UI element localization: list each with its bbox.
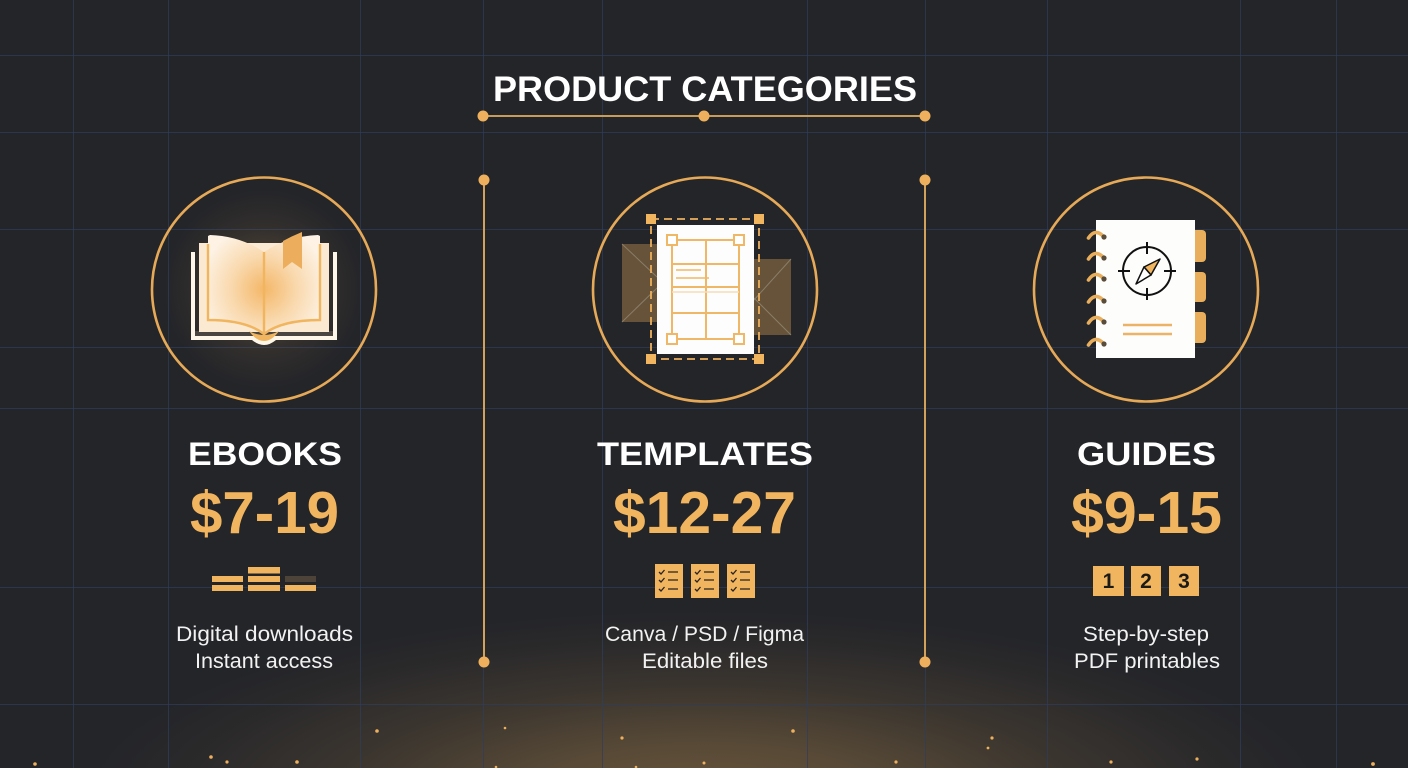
right divider: [920, 174, 930, 668]
text: templates description: Editable files: [642, 650, 768, 673]
heading: ebooks: EBOOKS: [188, 436, 342, 472]
text: templates description: Canva / PSD / Figma: [605, 623, 804, 646]
icon: stacked bars: [212, 567, 316, 591]
text: guides description: [1074, 623, 1220, 673]
heading: templates: TEMPLATES: [597, 436, 813, 472]
icon: numbered steps: 3: [1178, 570, 1190, 593]
icon: numbered steps: 2: [1140, 570, 1152, 593]
icon: checklists: [655, 564, 755, 598]
price: templates: $12-27: [613, 480, 796, 546]
icon: open book: [152, 178, 376, 402]
title bracket: [478, 110, 930, 122]
icon: spiral notebook with compass: [1034, 178, 1258, 402]
particles: [33, 727, 1375, 768]
panel: guides: [1034, 178, 1258, 673]
text: ebooks description: [176, 623, 353, 673]
text: templates description: [605, 623, 804, 673]
title: PRODUCT CATEGORIES: [493, 70, 917, 109]
icon: numbered steps: 1: [1103, 570, 1115, 593]
left divider: [478, 174, 490, 668]
text: guides description: Step-by-step: [1083, 623, 1209, 646]
price: guides: $9-15: [1071, 480, 1222, 546]
heading: guides: GUIDES: [1077, 436, 1216, 472]
panel: templates: [593, 178, 817, 673]
price: ebooks: $7-19: [190, 480, 339, 546]
text: ebooks description: Digital downloads: [176, 623, 353, 646]
icon: numbered steps: [1093, 566, 1199, 596]
icon: template document: [593, 178, 817, 402]
text: ebooks description: Instant access: [195, 650, 333, 673]
panel: ebooks: [152, 178, 376, 673]
text: guides description: PDF printables: [1074, 650, 1220, 673]
